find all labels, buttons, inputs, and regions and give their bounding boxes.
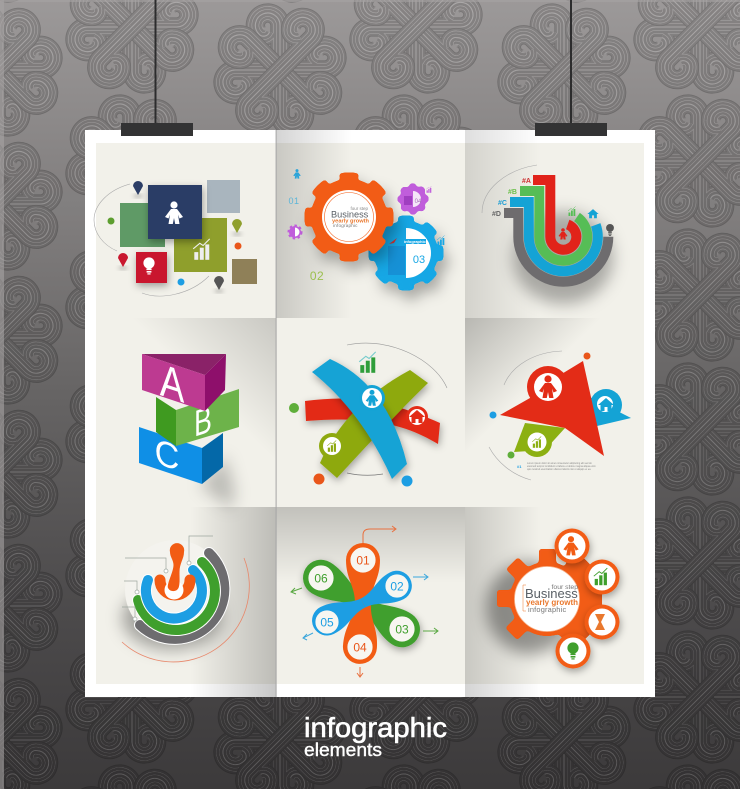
caption (517, 462, 596, 471)
small pies (490, 352, 590, 458)
paper clip left (121, 123, 193, 136)
red star (500, 361, 604, 456)
arrows (291, 526, 438, 677)
gear text (523, 584, 578, 614)
blue ribbon (312, 359, 407, 479)
badge: person (554, 528, 590, 564)
green petals (296, 553, 427, 654)
panel: star (489, 351, 631, 480)
block C: C (155, 430, 179, 479)
paper panel (85, 130, 655, 697)
leader lines (122, 536, 213, 621)
block C (139, 427, 223, 484)
title (304, 712, 447, 760)
block shadow (200, 455, 235, 510)
purple gear (396, 182, 430, 216)
blue band (510, 202, 598, 271)
caption: quis nostrud exercitation ullamco laboris nisi ut aliquip ex ea (527, 468, 591, 471)
panel: gear with circles (486, 528, 620, 668)
badge: chart (584, 560, 620, 594)
red band (533, 180, 576, 250)
icon: blue person (293, 169, 301, 179)
gear text: four step (350, 206, 368, 211)
gear text: infographic (528, 605, 566, 614)
small purple gear (288, 226, 302, 238)
gear text: Business (525, 586, 578, 601)
panel: gears (288, 169, 446, 293)
lower arc arrow (347, 473, 383, 475)
gear text: Business (331, 210, 369, 220)
block A: A (160, 355, 185, 414)
band labels (492, 178, 531, 218)
blue gear: 03 (413, 254, 425, 266)
gear text: four step (552, 584, 578, 591)
band icons (558, 206, 614, 240)
blue gear: infographic (404, 239, 427, 244)
gear text: infographic (333, 223, 358, 228)
purple gear: 04 (415, 199, 422, 205)
blue band (146, 570, 202, 619)
green band (138, 562, 215, 630)
gray band (504, 213, 608, 282)
number badges (308, 547, 415, 660)
red ribbon (305, 398, 440, 444)
red house badge (406, 406, 428, 428)
orange band (160, 580, 190, 595)
caption: eiusmod tempor incididunt ut labore et dolore magna aliqua enim (527, 465, 596, 468)
green arm (514, 423, 565, 457)
blue petals (307, 566, 417, 641)
block A (142, 354, 226, 414)
blue person badge (359, 385, 385, 411)
band shadow (513, 212, 613, 304)
icon: blue chart (437, 236, 444, 245)
label 02: 02 (310, 269, 324, 283)
band backing disc (125, 540, 225, 640)
icon: pins (108, 181, 242, 292)
caption: Lorem ipsum dolor sit amet consectetur adipiscing elit sed do (527, 462, 592, 465)
number badges: 05 (320, 616, 334, 630)
orange gear (302, 170, 396, 264)
olive ribbon (320, 370, 428, 478)
title: infographic (304, 712, 447, 743)
label 01: 01 (288, 196, 300, 206)
panel: concentric J bands (482, 165, 614, 304)
icon: chart (193, 239, 210, 260)
orange gear body (497, 546, 602, 651)
panel: ribbons (289, 343, 447, 486)
block B (156, 389, 239, 446)
icon: purple mark (426, 186, 431, 193)
orange drop (168, 543, 184, 591)
blue gear (366, 213, 446, 293)
panel: semi-circular bands (122, 536, 249, 662)
number badges: 06 (314, 572, 328, 586)
gear text (331, 206, 370, 228)
badge: hourglass (584, 604, 620, 640)
olive chart badge (319, 433, 345, 459)
top arc arrow (347, 343, 447, 388)
band labels: #D (492, 211, 501, 218)
panel: overlapping squares (94, 180, 257, 296)
icon: person (165, 201, 183, 224)
bands shadow (122, 586, 222, 650)
icon: bulb (143, 257, 155, 274)
band labels: #B (508, 189, 517, 196)
hanging strings (154, 0, 572, 124)
chart icon (359, 352, 376, 373)
orange outer arc (122, 558, 249, 662)
title: elements (304, 740, 382, 760)
band labels: #C (498, 200, 507, 207)
green band (520, 191, 587, 261)
blue arm (582, 389, 631, 426)
block B: B (194, 397, 212, 445)
gray band (140, 553, 224, 639)
gear shadow (486, 562, 574, 654)
paper clip right (535, 123, 607, 136)
number badges: 03 (395, 622, 409, 636)
band labels: #A (522, 178, 531, 185)
badge: bulb (556, 634, 590, 668)
caption: #1 (517, 464, 522, 469)
gear text: yearly growth (526, 598, 578, 607)
number badges: 04 (353, 640, 367, 654)
panel: ABC blocks (139, 354, 239, 510)
number badges: 02 (390, 580, 404, 594)
number badges: 01 (356, 554, 370, 568)
small pies (289, 403, 412, 486)
panel: six petals (291, 526, 438, 677)
orange petals (342, 543, 380, 665)
gear text: yearly growth (332, 218, 370, 224)
